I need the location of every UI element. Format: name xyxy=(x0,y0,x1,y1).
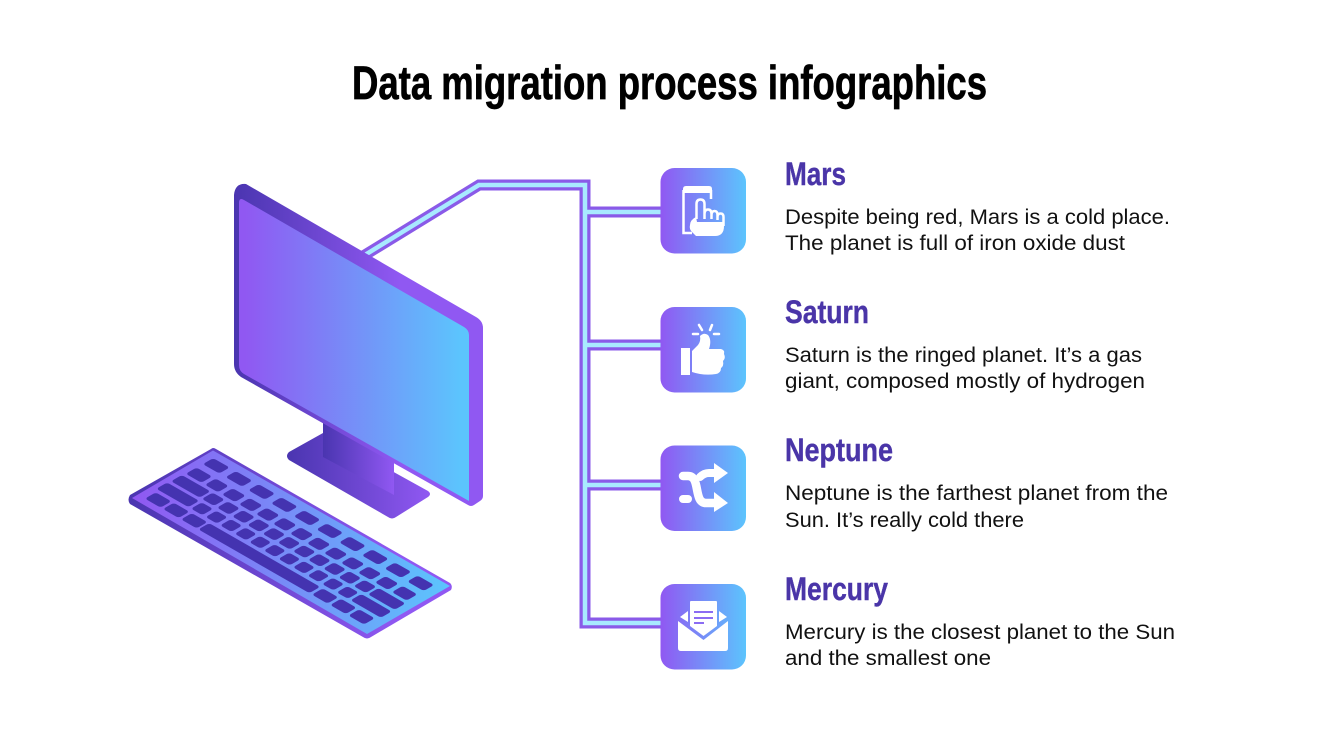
heading: Mercury: Mercury xyxy=(785,571,888,607)
monitor screen xyxy=(239,199,469,501)
text: Mercury description: and the smallest one xyxy=(785,647,991,670)
text: Saturn description xyxy=(785,344,1145,393)
illustration: computer xyxy=(128,184,483,638)
text: Saturn description: Saturn is the ringed planet. It’s a gas xyxy=(785,344,1142,367)
connector lines xyxy=(360,185,665,623)
keyboard xyxy=(128,448,452,638)
monitor stand neck xyxy=(323,415,394,495)
title: Data migration process infographics xyxy=(352,56,987,109)
text: Neptune description: Neptune is the farthest planet from the xyxy=(785,482,1168,505)
item: Mars xyxy=(660,156,1170,255)
item: Mercury xyxy=(660,571,1175,670)
icon: thumbs up xyxy=(660,307,746,392)
heading: Saturn: Saturn xyxy=(785,294,869,330)
item: Saturn xyxy=(660,294,1145,393)
text: Saturn description: giant, composed mostly of hydrogen xyxy=(785,370,1145,393)
text: Neptune description xyxy=(785,482,1168,532)
item: Neptune xyxy=(660,432,1168,532)
keyboard top face xyxy=(132,450,450,634)
text: Neptune description: Sun. It’s really cold there xyxy=(785,509,1024,532)
icon: shuffle arrows xyxy=(660,446,746,531)
heading: Mars: Mars xyxy=(785,156,846,192)
text: Mars description xyxy=(785,206,1170,255)
keyboard body xyxy=(128,448,452,638)
text: Mercury description xyxy=(785,621,1175,670)
monitor stand base xyxy=(287,433,430,518)
heading: Neptune: Neptune xyxy=(785,432,893,468)
text: Mars description: The planet is full of iron oxide dust xyxy=(785,232,1125,255)
text: Mars description: Despite being red, Mars is a cold place. xyxy=(785,206,1170,229)
keyboard keys xyxy=(142,457,436,626)
monitor bezel xyxy=(234,184,483,506)
icon: open envelope xyxy=(660,584,746,670)
text: Mercury description: Mercury is the closest planet to the Sun xyxy=(785,621,1175,644)
icon: phone touch xyxy=(660,168,746,254)
